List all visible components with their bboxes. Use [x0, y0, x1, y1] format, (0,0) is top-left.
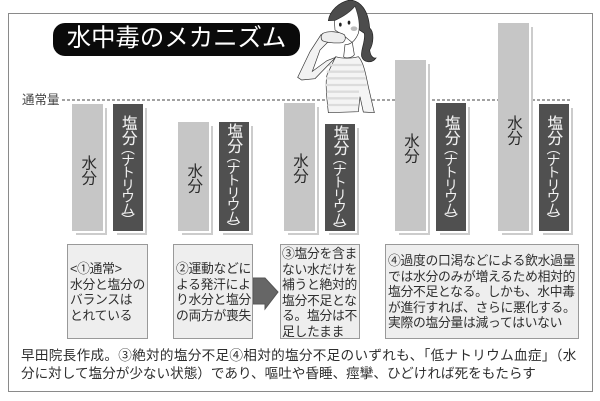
panel 4 text: 塩分不足となる。しかも、水中毒 — [388, 284, 575, 299]
group 1 salt bar: ナトリウム — [120, 153, 136, 215]
footer note: 分に対して塩分が少ない状態）であり、嘔吐や昏睡、痙攣、ひどければ死をもたらす — [21, 366, 536, 380]
panel 4 text: では水分のみが増えるため相対的 — [388, 268, 575, 284]
label: normal level: 通常量 — [22, 93, 60, 107]
group 2 salt bar: （ — [226, 149, 242, 161]
panel 3 text: 塩分不足とな — [282, 292, 357, 308]
glass — [321, 32, 345, 43]
panel 2 — [173, 244, 253, 339]
group 3 salt bar: 塩分 — [332, 125, 348, 155]
group 5 salt bar: ナトリウム — [546, 153, 562, 215]
face — [334, 6, 359, 58]
group 5 salt bar: 塩分 — [545, 115, 562, 145]
group 4 salt bar: （ — [443, 141, 459, 153]
group 4 water bar: 水分 — [402, 133, 419, 163]
panel 1 text: とれている — [70, 308, 132, 322]
group 4 water bar — [395, 60, 426, 230]
sweater stripes — [326, 65, 367, 105]
panel 3 text: 足したまま — [282, 324, 344, 338]
group 5 salt bar: ） — [546, 213, 562, 225]
group 2 salt bar: ） — [226, 221, 242, 233]
panel 2 text — [176, 261, 251, 322]
group 3 salt bar: ナトリウム — [332, 163, 348, 225]
torso — [326, 57, 374, 113]
group 1 water bar — [72, 104, 103, 231]
panel 3 text: る。塩分は不 — [282, 308, 357, 323]
group 4 salt bar: 塩分 — [443, 115, 460, 145]
group 3 water bar: 水分 — [291, 153, 308, 183]
panel 4 text — [388, 253, 575, 330]
group 2 water bar: 水分 — [185, 162, 202, 192]
panel 1 text: バランスは — [70, 292, 132, 307]
group 5 salt bar: （ — [546, 141, 562, 153]
footer note: 早田院長作成。③絶対的塩分不足④相対的塩分不足のいずれも、「低ナトリウム血症」（水 — [21, 348, 577, 363]
arrow — [253, 278, 279, 310]
group 1 salt bar — [113, 104, 143, 231]
panel 2 text: よる発汗によ — [176, 276, 251, 292]
group 1 salt bar: 塩分 — [120, 115, 137, 145]
group 4 salt bar: ） — [443, 213, 459, 225]
panel 1 text: <①通常> — [70, 261, 122, 276]
panel 1 — [67, 244, 148, 339]
group 4 salt bar — [436, 103, 466, 230]
group 2 salt bar: ナトリウム — [226, 161, 242, 223]
group 3 water bar — [284, 102, 314, 230]
title: 水中毒のメカニズム — [67, 24, 286, 52]
group 5 salt bar — [538, 104, 568, 230]
panel 3 text: 補うと絶対的 — [282, 277, 357, 292]
panel 3 text: ない水だけを — [282, 262, 357, 276]
hair — [328, 0, 376, 62]
panel 2 text: り水分と塩分 — [176, 292, 251, 307]
group 2 salt bar: 塩分 — [225, 123, 242, 153]
group 4 salt bar: ナトリウム — [443, 153, 459, 215]
group 1 salt bar: （ — [120, 141, 136, 153]
group 3 salt bar: ） — [332, 223, 348, 235]
panel 2 text: ②運動などに — [176, 261, 251, 276]
panel 1 text — [70, 261, 145, 322]
panel 3 text: ③塩分を含ま — [282, 246, 357, 261]
panel 4 text: 実際の塩分量は減ってはいない — [388, 315, 562, 330]
group 1 salt bar: ） — [120, 213, 136, 225]
group 2 salt bar — [218, 122, 248, 231]
arm — [298, 35, 336, 80]
panel 1 text: 水分と塩分の — [70, 276, 145, 292]
illustration: woman drinking water — [297, 0, 377, 113]
panel 3 text — [282, 246, 357, 338]
group 3 salt bar: （ — [332, 151, 348, 163]
group 3 salt bar — [324, 124, 355, 230]
eyes and cheek — [339, 21, 357, 31]
group 5 water bar: 水分 — [505, 115, 522, 145]
panel 4 — [385, 244, 578, 339]
group 5 water bar — [498, 23, 528, 230]
panel 2 text: の両方が喪失 — [176, 308, 251, 322]
panel 3 — [280, 244, 360, 339]
group 2 water bar — [178, 122, 209, 231]
panel 4 text: が進行すれば、さらに悪化する。 — [388, 300, 575, 314]
panel 4 text: ④過度の口渇などによる飲水過量 — [388, 253, 575, 268]
footer note — [21, 348, 577, 380]
group 1 water bar: 水分 — [79, 155, 96, 185]
